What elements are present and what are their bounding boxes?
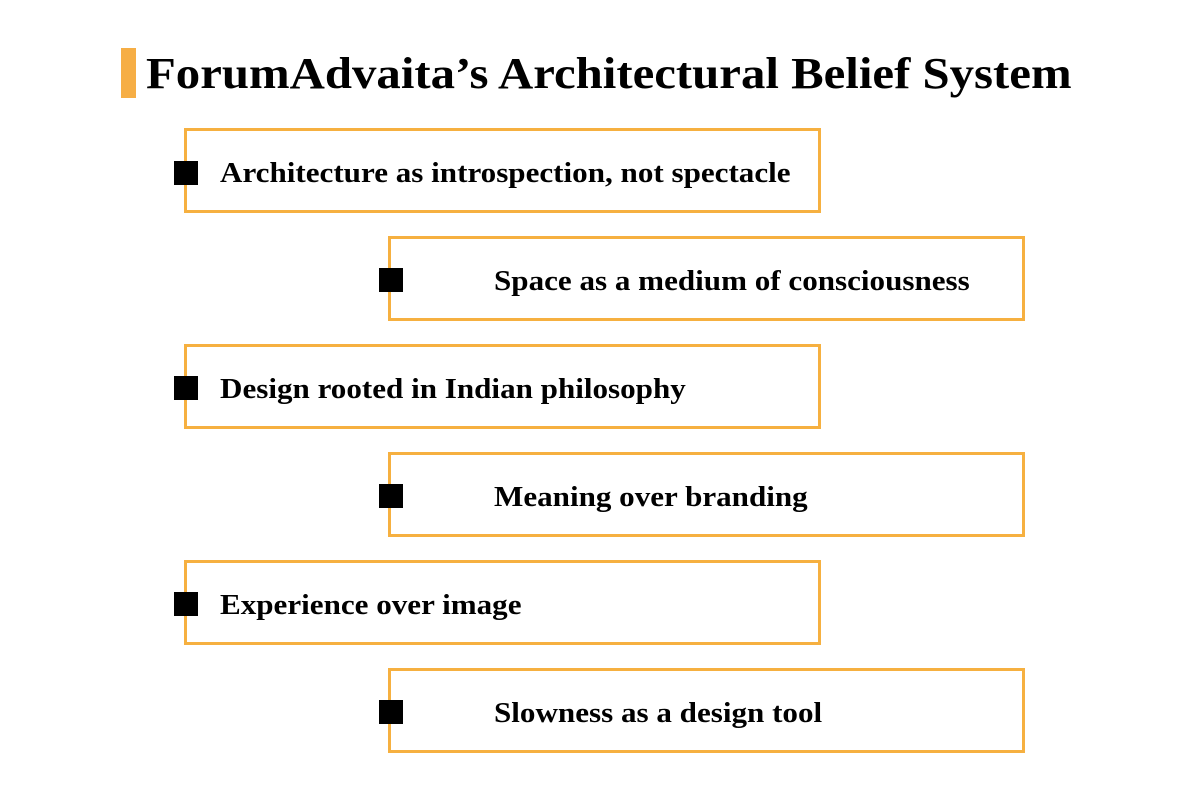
- bullet 1: [174, 161, 198, 185]
- text 3: Design rooted in Indian philosophy: [220, 374, 686, 405]
- box 3: [184, 344, 821, 429]
- text 6: Slowness as a design tool: [494, 698, 822, 729]
- box 6: [388, 668, 1025, 753]
- title accent bar: [121, 48, 136, 98]
- box 4: [388, 452, 1025, 537]
- bullet 3: [174, 376, 198, 400]
- text 1: Architecture as introspection, not spectacle: [220, 158, 791, 189]
- bullet 4: [379, 484, 403, 508]
- bullet 2: [379, 268, 403, 292]
- bullet 5: [174, 592, 198, 616]
- text 5: Experience over image: [220, 590, 522, 621]
- box 2: [388, 236, 1025, 321]
- box 5: [184, 560, 821, 645]
- title: ForumAdvaita’s Architectural Belief System: [146, 49, 1072, 98]
- text 4: Meaning over branding: [494, 482, 808, 513]
- text 2: Space as a medium of consciousness: [494, 266, 970, 297]
- box 1: [184, 128, 821, 213]
- bullet 6: [379, 700, 403, 724]
